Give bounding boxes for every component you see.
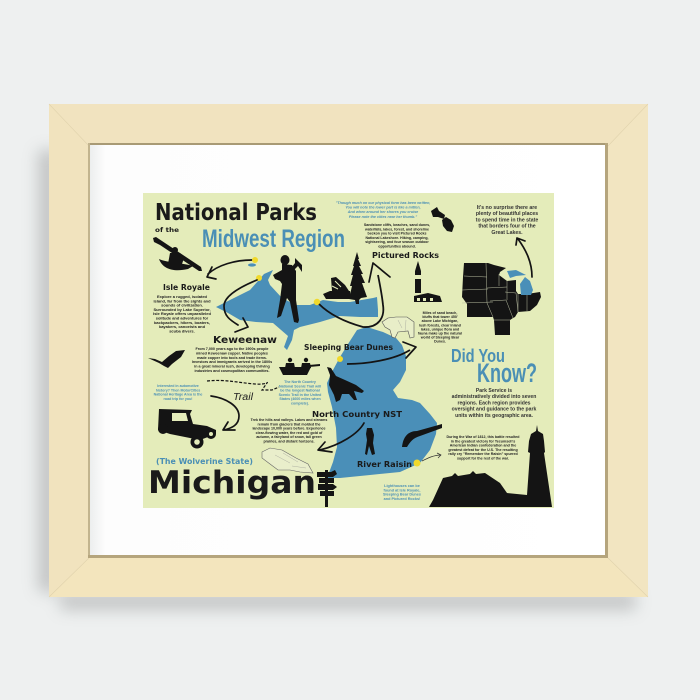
text: quote: You will note the lower part is like a mitten, — [345, 206, 421, 210]
title: National Parks: National Parks — [155, 200, 317, 226]
arrow: to the Great Lakes — [516, 238, 532, 277]
text: North Country: remain from glaciers that molded the — [257, 422, 321, 426]
text: lighthouses: and Pictured Rocks! — [384, 497, 420, 501]
text: North Country trail: The North Country — [284, 380, 316, 384]
icon: musket — [402, 424, 442, 447]
subtitle: The Wolverine State: (The Wolverine State) — [156, 457, 253, 466]
text: Park Service: Park Service is — [476, 388, 512, 394]
icon: wolf — [327, 367, 364, 402]
heading: Isle Royale: Isle Royale — [163, 283, 211, 292]
text: quote: Please note the cities near her thumb." — [349, 215, 417, 219]
text: North Country trail: National Scenic Trail will — [279, 384, 321, 388]
text: Isle Royale: Isle Royale offers unparalleled — [153, 311, 211, 316]
icon: small Michigan — [431, 207, 454, 232]
text: North Country: Trek the hills and valleys. Lakes and streams — [251, 418, 327, 422]
icon: miner with pickaxe — [273, 255, 302, 323]
text: did you know intro: that borders four of the — [478, 224, 536, 230]
map: lower peninsula — [327, 327, 437, 478]
text: Pictured Rocks: opportunities abound. — [378, 244, 416, 248]
text: Sleeping Bear: above Lake Michigan, — [422, 319, 458, 323]
heading: Pictured Rocks: Pictured Rocks — [372, 251, 439, 260]
text: North Country trail: States (4600 miles when — [279, 397, 321, 401]
text: Pictured Rocks: sightseeing, and four season outdoor — [365, 240, 429, 244]
text: did you know intro: to spend time in the state — [476, 217, 538, 223]
text: did you know intro: Great Lakes. — [491, 230, 523, 236]
map: upper peninsula — [216, 270, 378, 350]
text: Isle Royale: backpackers, hikers, boaters, — [154, 320, 210, 325]
text: River Raisin: During the War of 1812, this battle resulted — [447, 435, 519, 439]
text: automotive: road trip for you! — [164, 397, 192, 401]
arrow: North Country — [318, 423, 364, 452]
text: Isle Royale: sounds of civilization. — [161, 303, 203, 308]
text: Sleeping Bear: fauna make up the natural — [418, 332, 462, 336]
text: North Country: clear-flowing water, the red and gold of — [256, 431, 323, 435]
icon: bear — [382, 317, 414, 338]
arrow: Isle Royale — [207, 257, 258, 279]
text: Park Service — [452, 388, 536, 419]
text: Park Service: units within its geographic area. — [455, 413, 533, 419]
text: River Raisin — [447, 435, 519, 460]
text: Isle Royale: scuba divers. — [169, 328, 195, 333]
text: Pictured Rocks: waterfalls, lakes, forest, and shoreline — [364, 227, 429, 231]
text: Keweenaw: industries and cosmopolitan communities. — [194, 369, 270, 373]
text: North Country: prairies, and distant horizons. — [263, 440, 315, 444]
icon: signpost — [317, 470, 337, 507]
text: automotive: National Heritage Area is the — [154, 393, 202, 397]
text: Sleeping Bear: lakes, unique flora and — [421, 327, 459, 331]
text: North Country trail: be the longest National — [280, 389, 320, 393]
text: River Raisin: in the greatest victory for Tecumseh's — [451, 439, 515, 443]
text: lighthouses: Sleeping Bear Dunes — [383, 493, 421, 497]
trail: dashed line — [207, 380, 279, 390]
text: Isle Royale: solitude and adventures for — [156, 316, 209, 320]
text: Sleeping Bear: Miles of sand beach, — [423, 311, 457, 315]
text: lighthouses: found at Isle Royale, — [384, 488, 420, 492]
text: North Country trail: complete). — [291, 402, 309, 406]
text: River Raisin: American Indian confederation and the — [450, 444, 516, 448]
text: Keweenaw: Investors and immigrants arrived in the 1800s — [192, 360, 272, 364]
text: Isle Royale: island, far from the sights and — [153, 298, 211, 303]
title: Michigan: Michigan — [148, 465, 316, 501]
text: Sleeping Bear: lush forests, clear inland — [419, 323, 461, 327]
subtitle: Midwest Region: Midwest Region — [202, 225, 345, 253]
text: lighthouses: Lighthouses can be — [384, 484, 420, 488]
subtitle: of the: of the — [155, 226, 180, 234]
text: North Country trail — [279, 380, 321, 406]
picture frame — [49, 104, 648, 597]
text: River Raisin: greatest defeat for the U.S. The resulting — [448, 448, 518, 452]
text: North Country: landscape 10,000 years before. Experience — [252, 427, 326, 431]
icon: Model T car — [158, 409, 216, 448]
text: did you know intro: It's no surprise there are — [477, 205, 537, 211]
text: North Country: autumn, a fairyland of snow, tall green — [256, 435, 322, 439]
text: Pictured Rocks — [364, 223, 430, 248]
text: Sleeping Bear — [418, 311, 462, 344]
label: River Raisin: River Raisin — [357, 460, 412, 469]
text: automotive: Interested in automotive — [157, 384, 199, 388]
icon: canoe with paddlers — [279, 358, 320, 375]
text: Park Service: oversight and guidance to the park — [452, 407, 536, 413]
text: Isle Royale — [153, 294, 211, 333]
arrow: Pictured Rocks — [314, 263, 390, 327]
text: Keweenaw: mined Keweenaw copper. Native peoples — [196, 351, 268, 355]
text: Sleeping Bear: bluffs that tower 450' — [422, 315, 458, 319]
arrow: Trail — [211, 396, 239, 430]
arrow: Sleeping Bear Dunes — [337, 342, 416, 364]
text: Isle Royale: kayakers, canoeists and — [159, 324, 206, 329]
heading: Did You Know: Did You — [451, 346, 505, 366]
text: Keweenaw: From 7,000 years ago to the 1900s people — [196, 347, 268, 351]
marker: River Raisin — [414, 453, 441, 466]
text: North Country trail: Scenic Trail in the United — [279, 393, 321, 397]
label: Trail: Trail — [233, 392, 254, 403]
icon: hiker on rocks — [323, 277, 351, 299]
text: quote: And when around her shores you cruise — [347, 210, 418, 214]
icon: lighthouse and house silhouette — [429, 425, 552, 507]
icon: pine tree — [349, 252, 367, 304]
text: Keweenaw: made copper into tools and trade items. — [197, 356, 267, 360]
text: Isle Royale: Surrounded by Lake Superior, — [153, 307, 211, 312]
text: automotive — [154, 384, 202, 401]
text: Pictured Rocks: National Lakeshore. Hiking, camping, — [365, 236, 429, 240]
heading: Did You Know — [451, 346, 537, 388]
text: automotive: history? Then MotorCities — [156, 388, 200, 392]
text: Keweenaw: in a great mineral rush, developing thriving — [194, 365, 270, 369]
white mat — [90, 145, 605, 555]
map marker: Keweenaw arrow — [224, 275, 262, 332]
icon: kayaker — [153, 237, 202, 271]
text: did you know intro — [476, 205, 538, 236]
frame shadow — [38, 150, 636, 610]
text: Sleeping Bear: world of Sleeping Bear — [420, 336, 460, 340]
text: Sleeping Bear: Dunes. — [434, 340, 446, 344]
text: quote: "Though much on our physical form has been written, — [336, 201, 430, 205]
heading: Did You Know: Know? — [477, 358, 537, 388]
text: quote — [336, 201, 430, 219]
text: North Country — [251, 418, 327, 444]
heading: Keweenaw: Keweenaw — [213, 335, 277, 346]
icon: wolverine — [262, 448, 313, 473]
heading: North Country NST: North Country NST — [312, 410, 403, 419]
icon: hiker — [365, 428, 375, 455]
poster panel — [143, 193, 554, 508]
text: did you know intro: plenty of beautiful places — [476, 211, 538, 217]
text: Pictured Rocks: Sandstone cliffs, beaches, sand dunes, — [364, 223, 430, 227]
heading: Sleeping Bear Dunes: Sleeping Bear Dunes — [304, 343, 393, 352]
text: lighthouses — [383, 484, 421, 501]
text: Pictured Rocks: beckon you to visit Pictured Rocks — [368, 232, 426, 236]
text: Isle Royale: Explore a rugged, isolated — [157, 294, 208, 299]
text: River Raisin: rally cry "Remember the Raisin" spurred — [448, 452, 518, 456]
text: Keweenaw — [192, 347, 272, 373]
text: Park Service: regions. Each region provides — [457, 400, 531, 406]
text: Park Service: administratively divided into seven — [452, 394, 536, 400]
icon: eagle — [148, 350, 185, 368]
map: midwest states — [462, 263, 541, 335]
text: River Raisin: support for the rest of the war. — [457, 456, 509, 460]
icon: lighthouse small — [414, 261, 442, 302]
